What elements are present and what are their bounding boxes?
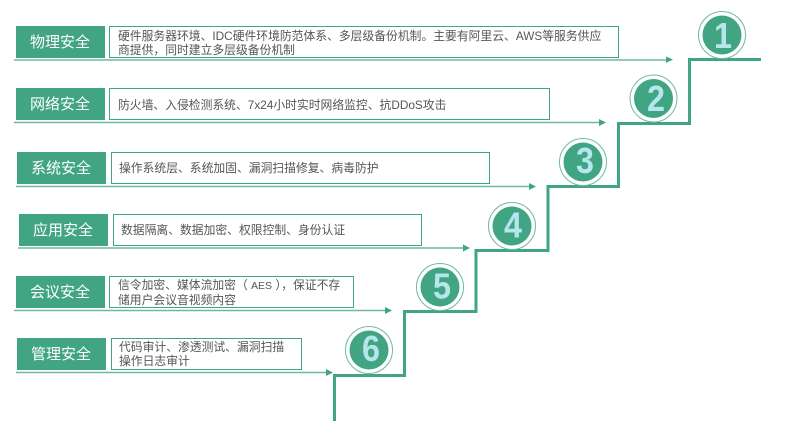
label: 系统安全: 系统安全 <box>31 160 91 177</box>
number badge 2 <box>630 75 677 122</box>
description: 管理安全 <box>111 338 302 370</box>
arrow: row 4 <box>18 244 470 252</box>
label: 物理安全 <box>16 26 105 58</box>
label: 应用安全 <box>19 214 108 246</box>
number badge 6: 6 <box>362 328 380 369</box>
arrow: row 6 <box>16 369 333 376</box>
description: 管理安全: 操作日志审计 <box>119 354 190 368</box>
arrow: row 1 <box>14 56 673 63</box>
description: 管理安全: 代码审计、渗透测试、漏洞扫描 <box>119 340 284 354</box>
number badge 1 <box>698 12 746 58</box>
description: 系统安全 <box>111 152 490 184</box>
label: 网络安全: 网络安全 <box>30 96 90 113</box>
number badge 4: 4 <box>504 204 522 246</box>
number badge 6 <box>346 326 392 374</box>
number badge 3: 3 <box>576 140 594 181</box>
label: 网络安全 <box>16 88 105 120</box>
number badge 3 <box>560 138 606 186</box>
arrow: row 5 <box>14 307 392 314</box>
label: 管理安全 <box>17 338 106 370</box>
number badge 4 <box>488 202 536 250</box>
number badge 1: 1 <box>714 15 732 56</box>
arrow: row 3 <box>16 183 536 190</box>
description: 应用安全: 数据隔离、数据加密、权限控制、身份认证 <box>121 223 345 237</box>
number badge 5: 5 <box>433 266 451 306</box>
description: 网络安全: 防火墙、入侵检测系统、7x24小时实时网络监控、抗DDoS攻击 <box>118 98 446 112</box>
description: 物理安全: 商提供，同时建立多层级备份机制 <box>118 42 295 56</box>
label: 物理安全: 物理安全 <box>30 34 90 51</box>
description: 会议安全 <box>109 276 354 308</box>
description: 会议安全: 储用户会议音视频内容 <box>118 293 236 307</box>
description: 物理安全: 硬件服务器环境、IDC硬件环境防范体系、多层级备份机制。主要有阿里云、AWS等服务供应 <box>118 28 601 42</box>
description: 系统安全: 操作系统层、系统加固、漏洞扫描修复、病毒防护 <box>119 161 379 175</box>
description: 网络安全 <box>109 88 550 120</box>
label: 会议安全: 会议安全 <box>30 284 90 301</box>
staircase line <box>334 60 761 421</box>
label: 会议安全 <box>16 276 105 308</box>
description: 应用安全 <box>113 214 422 246</box>
description: 物理安全 <box>109 26 619 58</box>
description: 会议安全: 信令加密、媒体流加密（ AES ），保证不存 <box>118 278 340 292</box>
arrow: row 2 <box>14 119 606 126</box>
number badge 5 <box>416 264 464 310</box>
label: 应用安全: 应用安全 <box>33 222 93 239</box>
label: 系统安全 <box>17 152 106 184</box>
label: 管理安全: 管理安全 <box>31 346 91 363</box>
number badge 2: 2 <box>647 78 665 119</box>
